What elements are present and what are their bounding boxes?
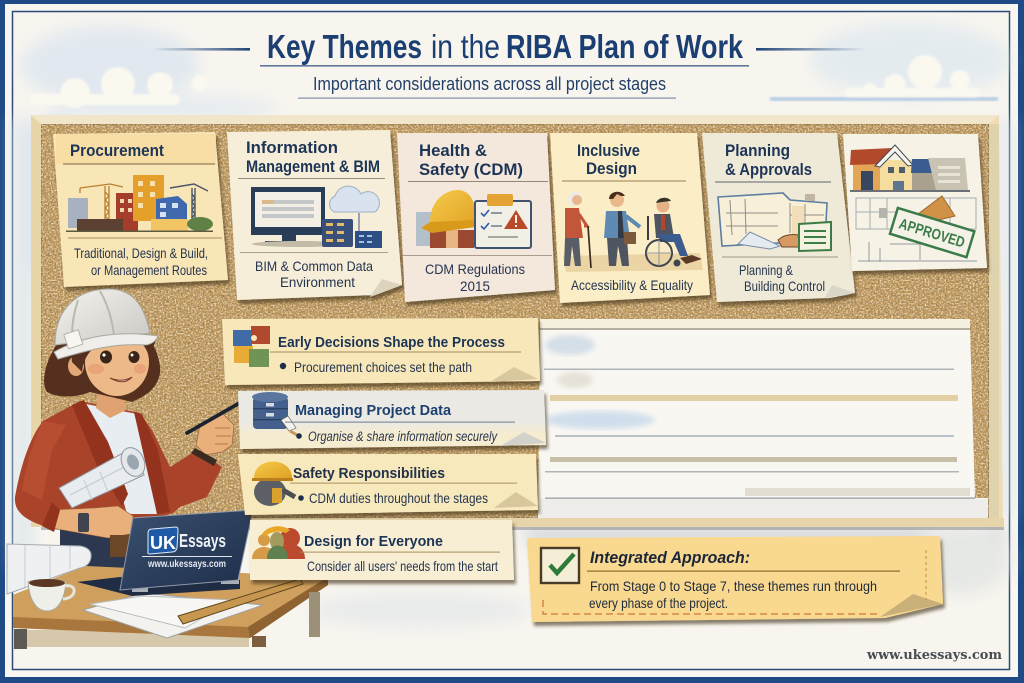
icon: diverse group of people xyxy=(252,526,305,559)
note: Planning & Approvals: & Approvals xyxy=(725,160,812,179)
desk xyxy=(13,566,328,649)
strip: Safety Responsibilities: Safety Responsibilities xyxy=(293,465,445,482)
shirt xyxy=(86,404,157,514)
raised hand with pen xyxy=(187,399,247,466)
logo: UK Essays: UK xyxy=(150,533,176,553)
trousers xyxy=(60,530,132,568)
note: Procurement: Traditional, Design & Build, xyxy=(74,245,208,261)
icon: construction skyline xyxy=(66,175,213,232)
strip: Managing Project Data: Managing Project Data xyxy=(295,402,452,419)
note: Planning & Approvals xyxy=(702,133,855,302)
cork board frame xyxy=(31,115,1004,530)
note: Inclusive Design xyxy=(550,133,710,303)
title: RIBA Plan of Work xyxy=(506,28,744,65)
note: Planning & Approvals: Building Control xyxy=(744,278,825,294)
laptop with UK Essays logo xyxy=(77,510,253,596)
note: Health & Safety (CDM): Health & xyxy=(419,141,487,160)
note: Inclusive Design: Accessibility & Equality xyxy=(571,277,693,293)
logo: UK Essays xyxy=(142,527,232,570)
note: Procurement: or Management Routes xyxy=(91,262,207,278)
worker character xyxy=(15,289,247,568)
callout: Integrated Approach xyxy=(527,536,943,622)
note: Information Management & BIM: Management & BIM xyxy=(246,157,380,176)
note: Information Management & BIM: Information xyxy=(246,138,338,157)
subtitle: Important considerations across all project stages xyxy=(313,74,666,94)
note: Information Management & BIM xyxy=(227,130,402,300)
neck and hair xyxy=(96,390,126,418)
note: Inclusive Design: Inclusive xyxy=(577,141,640,160)
title: Key Themes xyxy=(267,28,422,65)
callout: Integrated Approach: From Stage 0 to Stage 7, these themes run through xyxy=(590,578,877,594)
note: Health & Safety (CDM): 2015 xyxy=(460,278,490,294)
icon: plan drawing and folder xyxy=(856,196,977,262)
note: Health & Safety (CDM) xyxy=(397,133,555,302)
strip: Safety Responsibilities: CDM duties throughout the stages xyxy=(309,490,488,506)
logo: UK Essays: Essays xyxy=(179,531,226,551)
strip: Managing Project Data: Organise & share information securely xyxy=(308,428,498,444)
website footer: www.ukessays.com xyxy=(866,648,1002,663)
face xyxy=(85,328,149,396)
icon: hard hat and clipboard xyxy=(416,190,531,248)
strip: Early Decisions Shape the Process: Procurement choices set the path xyxy=(294,359,472,375)
note: Information Management & BIM: Environment xyxy=(280,274,355,290)
note: Planning & Approvals: Planning xyxy=(725,141,790,160)
stamp: approved: APPROVED xyxy=(897,215,967,252)
strip: Design for Everyone: Design for Everyone xyxy=(304,533,443,550)
rolled blueprint held under arm xyxy=(59,444,149,508)
note: Information Management & BIM: BIM & Common Data xyxy=(255,258,373,274)
note: Health & Safety (CDM): Safety (CDM) xyxy=(419,160,523,179)
strip: Design for Everyone xyxy=(250,520,514,580)
note: Health & Safety (CDM): CDM Regulations xyxy=(425,261,525,277)
icon: hard hat and gear xyxy=(252,462,295,506)
icon: white hard hat xyxy=(54,289,158,359)
board panel: blank lined notice sheet xyxy=(538,319,988,518)
icon: database xyxy=(252,392,297,435)
note: Inclusive Design: Design xyxy=(586,159,637,178)
forearm and hand with watch xyxy=(42,502,133,557)
note: Procurement: Procurement xyxy=(70,141,164,160)
logo: UK Essays: www.ukessays.com xyxy=(147,558,226,570)
strip: Managing Project Data xyxy=(238,390,546,449)
icon: coffee cup xyxy=(28,579,74,611)
strip: Early Decisions Shape the Process: Early Decisions Shape the Process xyxy=(278,334,505,351)
jacket xyxy=(15,401,222,528)
strip: Safety Responsibilities xyxy=(238,454,538,515)
icon: three people, one using a wheelchair xyxy=(563,192,703,272)
icon: jigsaw puzzle xyxy=(233,326,270,367)
title xyxy=(152,28,866,67)
note: Planning & Approvals: Planning & xyxy=(739,262,794,278)
note: approved plans xyxy=(843,134,987,271)
strip: Design for Everyone: Consider all users' needs from the start xyxy=(307,558,498,574)
title: in the xyxy=(431,28,500,65)
papers and ruler on desk xyxy=(83,579,303,638)
rolled blueprints on desk xyxy=(7,544,91,594)
icon: plans, hand and permit document xyxy=(718,193,831,251)
callout: Integrated Approach: every phase of the project. xyxy=(589,595,728,611)
icon: monitor, cloud and servers xyxy=(251,186,382,248)
callout: Integrated Approach: Integrated Approach: xyxy=(590,548,750,567)
icon: green check box xyxy=(541,548,579,583)
icon: houses xyxy=(850,145,970,192)
note: Procurement xyxy=(53,132,228,287)
strip: Early Decisions Shape the Process xyxy=(222,318,540,385)
